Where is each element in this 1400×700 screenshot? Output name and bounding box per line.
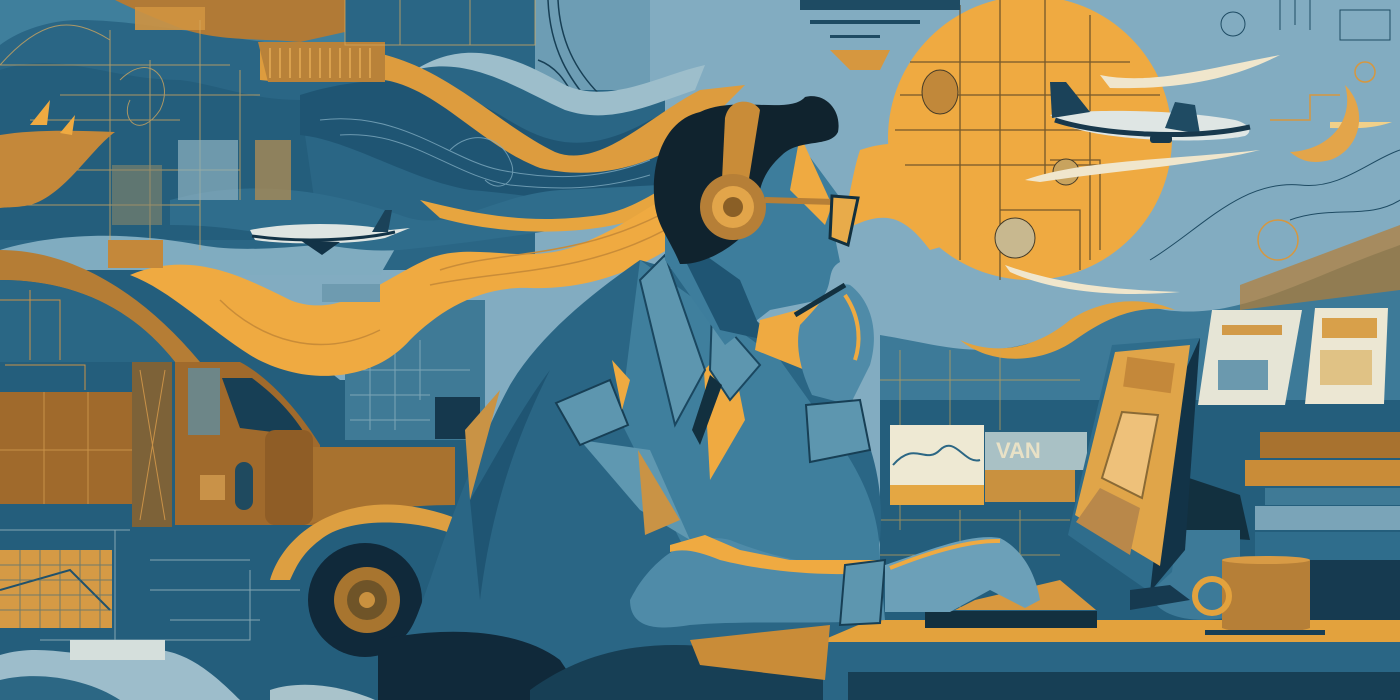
orange leaf left — [0, 100, 115, 208]
computer monitor — [1068, 338, 1200, 610]
books stack — [1245, 432, 1400, 622]
truck trailer — [0, 250, 200, 527]
forearm and typing hand — [630, 535, 1040, 627]
head and neck — [665, 130, 840, 370]
large plane — [1050, 82, 1250, 143]
lower right hills — [880, 225, 1400, 640]
truck wheel — [308, 543, 422, 657]
sun circle — [835, 0, 1172, 280]
contrails — [1005, 55, 1392, 294]
circuit lines lower left — [0, 530, 300, 640]
desk — [690, 620, 1400, 700]
hand on chin — [795, 284, 874, 462]
middle-lower grid panel — [345, 300, 485, 440]
keyboard — [925, 580, 1097, 628]
control panel small graphic — [108, 140, 291, 268]
shirt patches and highlights — [465, 255, 760, 535]
orange grid block lower left — [0, 550, 112, 628]
documents top right — [1198, 308, 1388, 405]
coffee mug — [1195, 556, 1325, 635]
charts on back wall: VAN — [996, 438, 1041, 463]
top right details — [800, 0, 1400, 260]
top-left brown block — [115, 0, 385, 82]
background: dark upper-left panel — [0, 0, 665, 275]
lower wave bands — [130, 185, 690, 376]
headphones — [700, 102, 766, 240]
lower-left backdrop — [0, 270, 470, 700]
operator torso — [378, 260, 881, 700]
pencil cup — [1150, 470, 1250, 620]
truck cab — [175, 362, 455, 580]
clouds lower left — [0, 640, 375, 700]
small plane left — [250, 210, 410, 255]
charts on back wall — [890, 425, 1087, 505]
grid lines upper left — [0, 0, 535, 260]
hair — [654, 96, 839, 264]
glasses — [765, 196, 858, 245]
upper wave bands behind the head — [260, 44, 745, 205]
